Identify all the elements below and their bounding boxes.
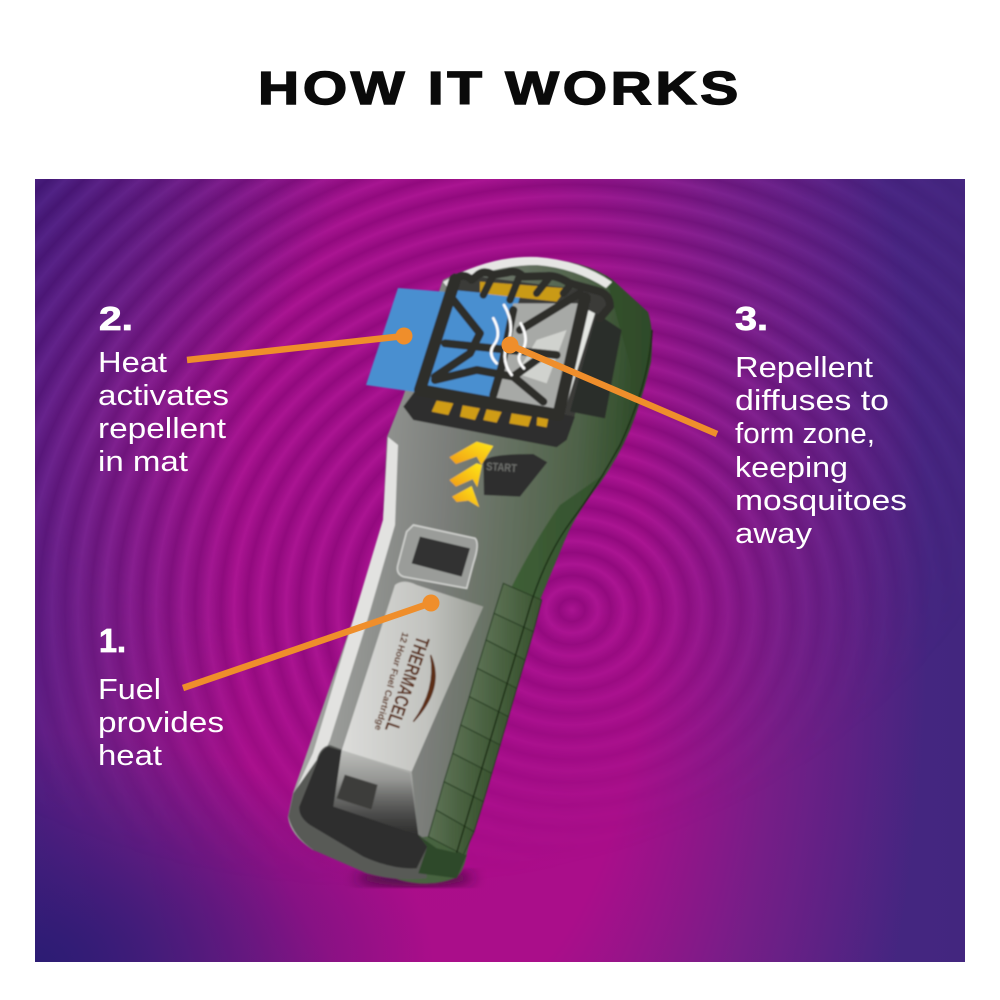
text block: step 3: 3. <box>735 300 768 337</box>
device body: clear housing <box>288 258 640 850</box>
text block: step 3: form zone, <box>735 418 875 450</box>
cartridge label subtitle: 12 Hour Fuel Cartridge <box>373 631 410 732</box>
cartridge label: THERMACELL <box>380 633 432 735</box>
rubber grip ribs <box>428 583 542 855</box>
text block: step 3: diffuses to <box>735 385 889 417</box>
text block: step 1 <box>98 622 224 772</box>
title: HOW IT WORKS <box>258 62 742 114</box>
callout line 3: to grill <box>502 336 717 434</box>
device body: green shell <box>288 258 652 884</box>
text block: step 3: Repellent <box>735 352 873 384</box>
mat under grill <box>417 290 520 400</box>
yellow heater bars <box>480 282 567 302</box>
text block: step 1: 1. <box>99 622 126 659</box>
text block: step 1: Fuel <box>98 674 161 706</box>
cartridge logo swoosh <box>413 655 435 722</box>
yellow heater windows <box>432 401 548 427</box>
text block: step 3: mosquitoes <box>735 485 907 517</box>
text block: step 2: 2. <box>99 300 133 337</box>
yellow chevrons: upward heat <box>449 442 493 507</box>
shell seam line <box>456 330 652 855</box>
text block: step 2: repellent <box>98 413 226 445</box>
grill lower lip <box>403 387 575 447</box>
head interior <box>403 272 622 447</box>
start button: START <box>486 461 517 475</box>
text block: step 3 <box>735 300 907 550</box>
text block: step 2 <box>98 300 229 478</box>
clear housing: white left edge <box>296 437 398 790</box>
metal chamber <box>490 303 590 417</box>
callout line 2: to mat <box>187 328 412 360</box>
text block: step 3: keeping <box>735 452 848 484</box>
text block: step 1: heat <box>98 740 162 772</box>
grill <box>420 272 610 415</box>
background panel: purple and magenta ripple <box>35 179 965 962</box>
top white rim <box>443 257 612 288</box>
start button <box>483 454 547 497</box>
text block: step 2: in mat <box>98 446 188 478</box>
fuel cartridge <box>333 582 483 835</box>
text block: step 2: activates <box>98 380 229 412</box>
text block: step 2: Heat <box>98 347 167 379</box>
blue repellent mat <box>366 288 447 392</box>
heat waves <box>491 305 526 375</box>
text block: step 3: away <box>735 518 813 550</box>
shadow under device <box>355 870 475 886</box>
on/off switch <box>397 525 477 588</box>
base cap: dark bottom <box>288 745 467 879</box>
device: insect repeller <box>288 257 652 886</box>
callout line 1: to fuel <box>183 594 440 688</box>
chamber backing <box>413 273 610 420</box>
text block: step 1: provides <box>98 707 224 739</box>
side panel <box>570 313 622 418</box>
